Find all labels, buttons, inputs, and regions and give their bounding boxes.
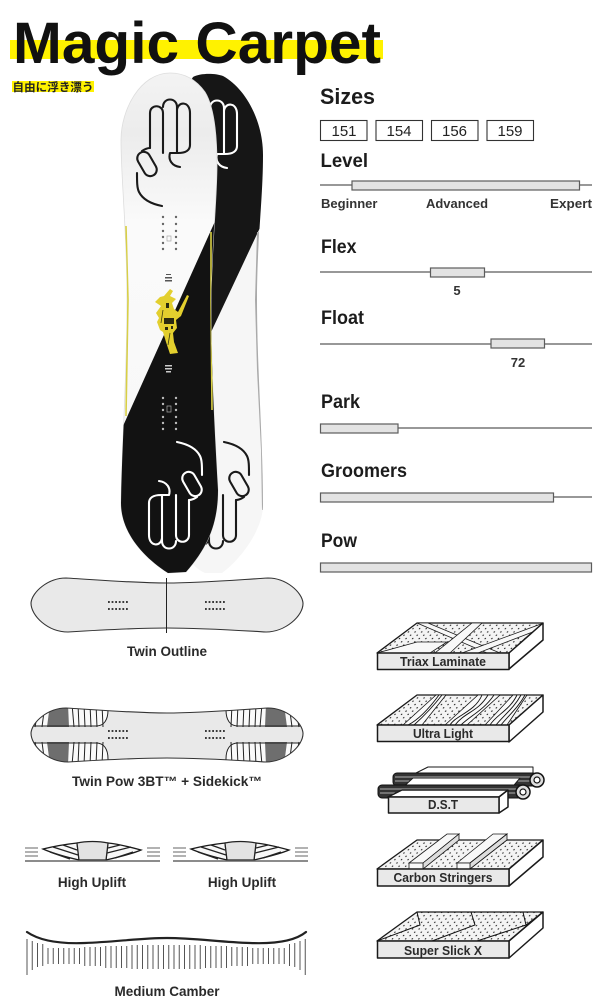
size 159: 159 [497, 123, 523, 140]
panel: groomers: Groomers [321, 460, 407, 482]
twin pow diagram: Twin Pow 3BT™ + Sidekick™ [72, 774, 262, 789]
medium camber diagram: Medium Camber [114, 984, 220, 999]
material: carbon stringers: Carbon Stringers [394, 871, 493, 885]
material: d.s.t [378, 767, 544, 813]
twin outline diagram: Twin Outline [127, 644, 207, 659]
inserts: top [162, 216, 177, 250]
panel: pow: Pow [321, 530, 358, 552]
material: super slick x [377, 912, 543, 958]
high uplift diagram: left: High Uplift [58, 875, 127, 890]
panel: level: Level [320, 150, 368, 172]
panel: flex [320, 236, 592, 298]
size 156 [432, 120, 478, 140]
panel: sizes: Sizes [320, 84, 375, 109]
panel: level: Expert [550, 196, 593, 211]
hand: top [135, 100, 190, 206]
material: d.s.t: D.S.T [428, 798, 458, 812]
size 159 [487, 120, 534, 140]
snowboard: front view [120, 72, 218, 574]
material: carbon stringers [377, 834, 543, 886]
panel: flex: Flex [321, 236, 357, 258]
inserts: bottom [162, 397, 177, 430]
panel: level [320, 150, 593, 211]
twin pow diagram [30, 708, 304, 786]
material: ultra light: Ultra Light [413, 727, 474, 741]
jester figure [155, 289, 189, 354]
panel: park [320, 391, 592, 433]
subtitle: 自由に浮き漂う [12, 80, 94, 94]
panel: level: Beginner [321, 196, 378, 211]
hand: bottom [149, 442, 204, 548]
panel: flex: 5 [453, 283, 461, 298]
panel: level: Advanced [426, 196, 488, 211]
material: triax laminate [377, 623, 543, 670]
size 154: 154 [386, 123, 412, 140]
twin outline diagram [31, 578, 303, 659]
size 156: 156 [442, 123, 467, 140]
material: super slick x: Super Slick X [404, 944, 483, 958]
material: ultra light [377, 695, 543, 742]
panel: park: Park [321, 391, 360, 413]
snowboard: back view [192, 74, 263, 573]
high uplift diagram: right: High Uplift [208, 875, 277, 890]
panel: float: Float [321, 307, 364, 329]
high uplift diagram: right [173, 842, 308, 890]
panel: pow [320, 530, 592, 572]
medium camber diagram [27, 932, 306, 999]
panel: groomers [320, 460, 592, 502]
size 154 [376, 120, 422, 140]
size 151: 151 [331, 123, 357, 140]
panel: float [320, 307, 592, 370]
panel: sizes [320, 84, 534, 140]
material: triax laminate: Triax Laminate [400, 655, 486, 669]
high uplift diagram: left [25, 842, 160, 890]
panel: float: 72 [511, 355, 525, 370]
size 151 [320, 120, 367, 140]
title highlight and title: Magic Carpet [13, 11, 381, 76]
